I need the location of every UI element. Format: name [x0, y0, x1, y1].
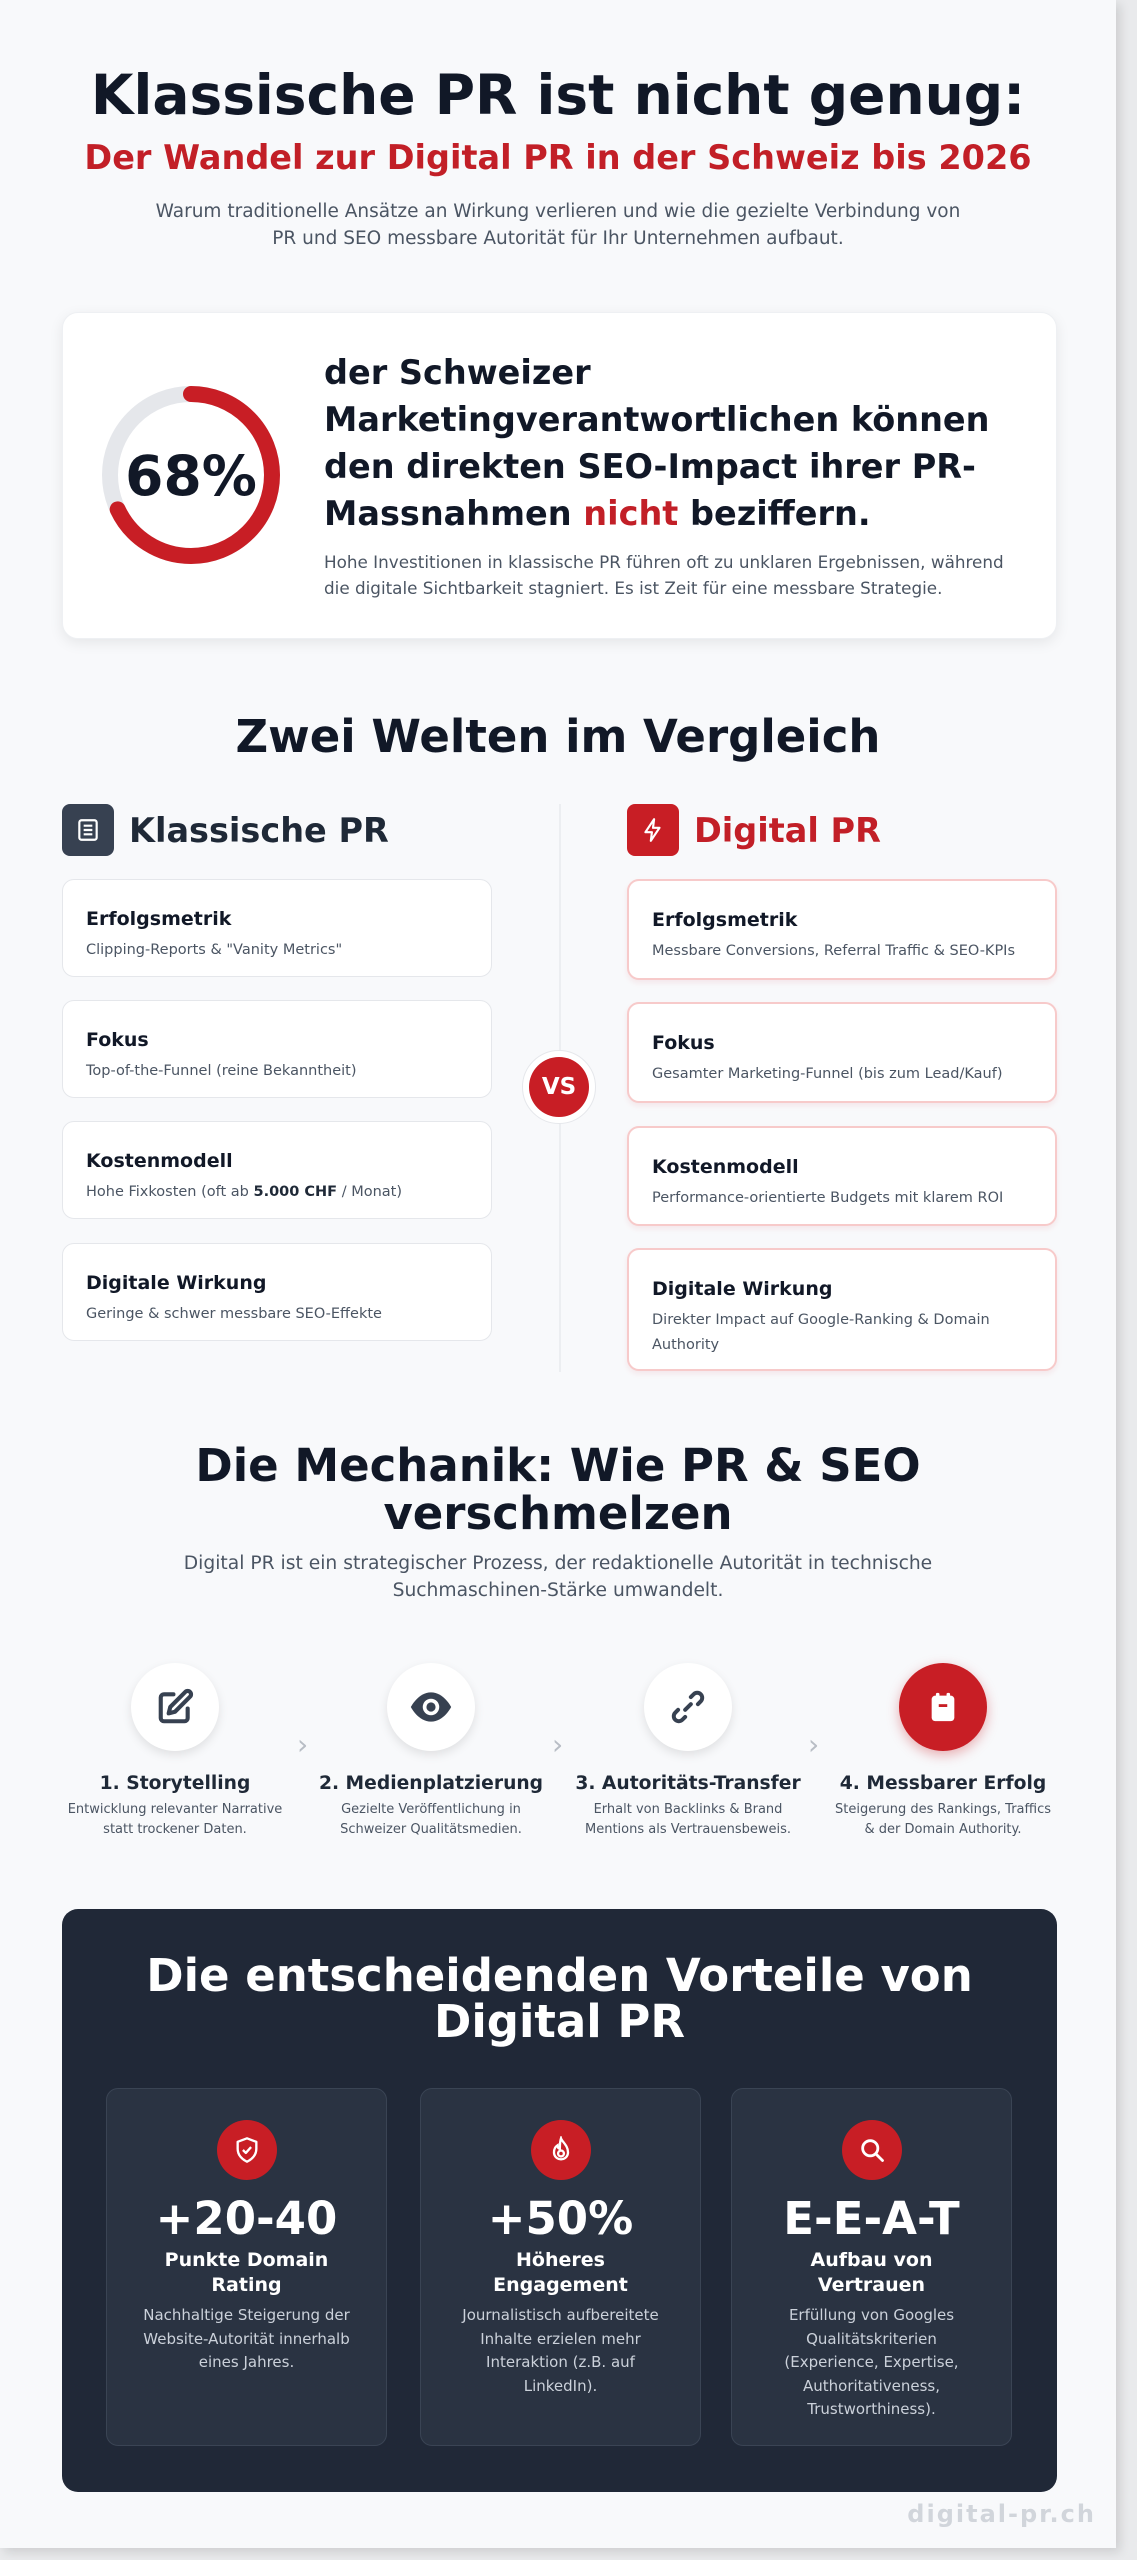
step 3: 3. Autoritäts-Transfer: [575, 1773, 801, 1794]
VS badge: VS: [542, 1074, 576, 1100]
card: klassisch Erfolgsmetrik: Clipping-Reports & "Vanity Metrics": [86, 942, 342, 958]
card: digital Digitale Wirkung: [627, 1248, 1057, 1371]
donut chart 68%: 68%: [125, 444, 257, 508]
icon: newspaper: [62, 804, 114, 856]
advantage card: E-E-A-T: Erfüllung von Googles Qualitätskriterien (Experience, Expertise, Authoritativeness, Trustworthiness).: [784, 2306, 959, 2418]
step 4: Steigerung des Rankings, Traffics: [835, 1802, 1051, 1817]
right header: Digital PR: Digital PR: [694, 811, 881, 850]
step 2: Schweizer Qualitätsmedien.: [340, 1822, 522, 1837]
advantage card: engagement: Journalistisch aufbereitete Inhalte erzielen mehr Interaktion (z.B. auf LinkedIn).: [462, 2306, 659, 2394]
icon: clipboard: [899, 1663, 987, 1751]
card: digital Erfolgsmetrik: Messbare Conversions, Referral Traffic & SEO-KPIs: [652, 943, 1015, 959]
heading: advantages: [146, 1949, 973, 2048]
panel: advantages: [62, 1909, 1057, 2492]
left header: Klassische PR: Klassische PR: [129, 811, 389, 850]
step 2: 2. Medienplatzierung: [319, 1773, 543, 1794]
icon: eye: [387, 1663, 475, 1751]
right header: Digital PR: [627, 804, 881, 856]
step 1: [68, 1688, 282, 1837]
panel: stat card: [62, 312, 1057, 639]
icon: shield: [216, 2120, 276, 2180]
step 3: [575, 1690, 801, 1837]
advantage card: engagement: Höheres: [516, 2249, 605, 2271]
arrow 3: ›: [808, 1728, 819, 1761]
card: klassisch Fokus: Fokus: [86, 1029, 149, 1051]
stat statement: der Schweizer Marketingverantwortlichen können den direkten SEO-Impact ihrer PR-Massnahmen nicht beziffern.: [324, 353, 990, 533]
heading: advantages: Digital PR: [434, 1995, 685, 2048]
advantage card: domain rating: Rating: [211, 2274, 282, 2296]
step 4: 4. Messbarer Erfolg: [840, 1773, 1046, 1794]
card: digital Digitale Wirkung: Direkter Impact auf Google-Ranking & Domain Authority: [652, 1312, 990, 1353]
subtitle: Der Wandel zur Digital PR in der Schweiz bis 2026: [84, 138, 1032, 177]
left header: Klassische PR: [62, 804, 389, 856]
heading: mechanics: [195, 1439, 921, 1540]
advantage card: E-E-A-T: [731, 2088, 1012, 2446]
advantage card: domain rating: [106, 2088, 387, 2446]
step 1: 1. Storytelling: [100, 1773, 250, 1794]
advantage card: engagement: Engagement: [493, 2274, 628, 2296]
step 4: [835, 1660, 1051, 1837]
card: klassisch Digitale Wirkung: Geringe & schwer messbare SEO-Effekte: [86, 1306, 382, 1322]
step 3: Erhalt von Backlinks & Brand: [594, 1802, 782, 1817]
advantage card: engagement: +50%: [488, 2192, 633, 2245]
card: digital Digitale Wirkung: Digitale Wirkung: [652, 1278, 832, 1300]
mechanics intro: [184, 1553, 932, 1601]
card: klassisch Erfolgsmetrik: Erfolgsmetrik: [86, 908, 231, 930]
advantage card: domain rating: +20-40: [156, 2192, 337, 2245]
card: digital Fokus: Gesamter Marketing-Funnel (bis zum Lead/Kauf): [652, 1066, 1002, 1082]
card: digital Kostenmodell: Kostenmodell: [652, 1156, 799, 1178]
card: digital Kostenmodell: [627, 1126, 1057, 1226]
mechanics intro: Digital PR ist ein strategischer Prozess, der redaktionelle Autorität in technische: [184, 1553, 932, 1574]
step 4: & der Domain Authority.: [864, 1822, 1022, 1837]
card: klassisch Digitale Wirkung: [62, 1243, 492, 1341]
arrow 1: ›: [297, 1728, 308, 1761]
heading: mechanics: Die Mechanik: Wie PR & SEO: [195, 1439, 921, 1492]
advantage card: E-E-A-T: Aufbau von: [810, 2249, 933, 2271]
step 2: Gezielte Veröffentlichung in: [341, 1802, 521, 1817]
intro text: Warum traditionelle Ansätze an Wirkung verlieren und wie die gezielte Verbindung von: [156, 201, 960, 222]
mechanics intro: Suchmaschinen-Stärke umwandelt.: [393, 1580, 723, 1601]
footer brand: digital-pr.ch: [907, 2500, 1096, 2528]
arrow 2: ›: [552, 1728, 563, 1761]
card: digital Erfolgsmetrik: [627, 879, 1057, 980]
advantage card: E-E-A-T: E-E-A-T: [783, 2192, 960, 2245]
advantage card: domain rating: Punkte Domain: [165, 2249, 328, 2271]
VS badge: [522, 1050, 596, 1124]
advantage card: E-E-A-T: Vertrauen: [818, 2274, 925, 2296]
card: klassisch Kostenmodell: [62, 1121, 492, 1219]
icon: lightning: [627, 804, 679, 856]
title: Klassische PR ist nicht genug:: [91, 63, 1025, 127]
intro text: PR und SEO messbare Autorität für Ihr Unternehmen aufbaut.: [272, 228, 844, 249]
heading: mechanics: verschmelzen: [383, 1487, 733, 1540]
heading: advantages: Die entscheidenden Vorteile von: [146, 1949, 973, 2002]
card: klassisch Fokus: Top-of-the-Funnel (reine Bekanntheit): [86, 1063, 357, 1079]
icon: search: [842, 2120, 902, 2180]
card: klassisch Erfolgsmetrik: [62, 879, 492, 977]
heading: comparison: Zwei Welten im Vergleich: [236, 710, 880, 763]
card: digital Fokus: [627, 1002, 1057, 1103]
card: klassisch Digitale Wirkung: Digitale Wirkung: [86, 1272, 266, 1294]
step 1: statt trockener Daten.: [103, 1822, 247, 1837]
advantage card: domain rating: Nachhaltige Steigerung der Website-Autorität innerhalb eines Jahres.: [143, 2306, 350, 2371]
stat note: Hohe Investitionen in klassische PR führen oft zu unklaren Ergebnissen, während die digitale Sichtbarkeit stagniert. Es ist Zeit für eine messbare Strategie.: [324, 552, 1004, 598]
card: klassisch Kostenmodell: Kostenmodell: [86, 1150, 233, 1172]
card: digital Erfolgsmetrik: Erfolgsmetrik: [652, 909, 797, 931]
card: klassisch Fokus: [62, 1000, 492, 1098]
donut chart 68%: [102, 386, 280, 564]
icon: edit: [131, 1663, 219, 1751]
card: klassisch Kostenmodell: Hohe Fixkosten (oft ab 5.000 CHF / Monat): [86, 1184, 402, 1200]
advantage card: engagement: [420, 2088, 701, 2446]
card: digital Fokus: Fokus: [652, 1032, 715, 1054]
step 3: Mentions als Vertrauensbeweis.: [585, 1822, 791, 1837]
icon: flame: [530, 2120, 590, 2180]
step 1: Entwicklung relevanter Narrative: [68, 1802, 282, 1817]
intro text: [156, 201, 960, 249]
icon: link: [644, 1663, 732, 1751]
step 2: [319, 1692, 543, 1837]
card: digital Kostenmodell: Performance-orientierte Budgets mit klarem ROI: [652, 1190, 1003, 1206]
